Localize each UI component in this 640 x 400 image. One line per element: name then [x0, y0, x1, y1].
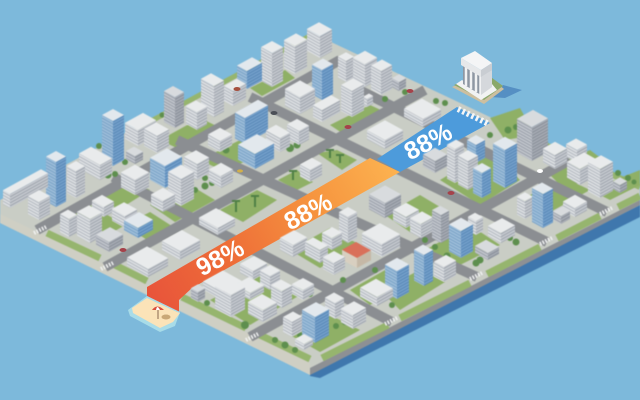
temple base: [452, 73, 504, 104]
value label: 88% orange: 88%: [280, 188, 337, 236]
block lawns: [60, 70, 640, 352]
value label: 98%: 98%: [192, 234, 249, 282]
temple roof: [461, 51, 492, 70]
buildings: [3, 22, 627, 350]
data band: orange to red: [147, 158, 400, 312]
temple colonnade: [463, 65, 481, 95]
roads: [37, 60, 607, 337]
temple entablature: [461, 58, 481, 77]
trees: [96, 89, 636, 353]
crosswalks: [34, 208, 612, 340]
cars: [120, 87, 543, 252]
promenade right: [310, 200, 640, 375]
shallow water glow: [128, 296, 180, 332]
shoreline lawns: [47, 36, 640, 359]
sand: [132, 298, 180, 328]
temple steps: [456, 80, 497, 100]
island side wall: [310, 205, 640, 378]
beach: [128, 296, 180, 332]
icon: beach umbrella: [152, 306, 170, 320]
promenade left: [0, 214, 310, 375]
temple landmark: [452, 51, 522, 104]
value label: 88% blue: 88%: [400, 118, 457, 166]
icon: palm trees: [232, 150, 344, 212]
temple side wall: [481, 70, 492, 95]
temple shadow: [490, 85, 522, 98]
data band: blue: [377, 107, 490, 172]
crosswalk at band end: [458, 109, 489, 124]
